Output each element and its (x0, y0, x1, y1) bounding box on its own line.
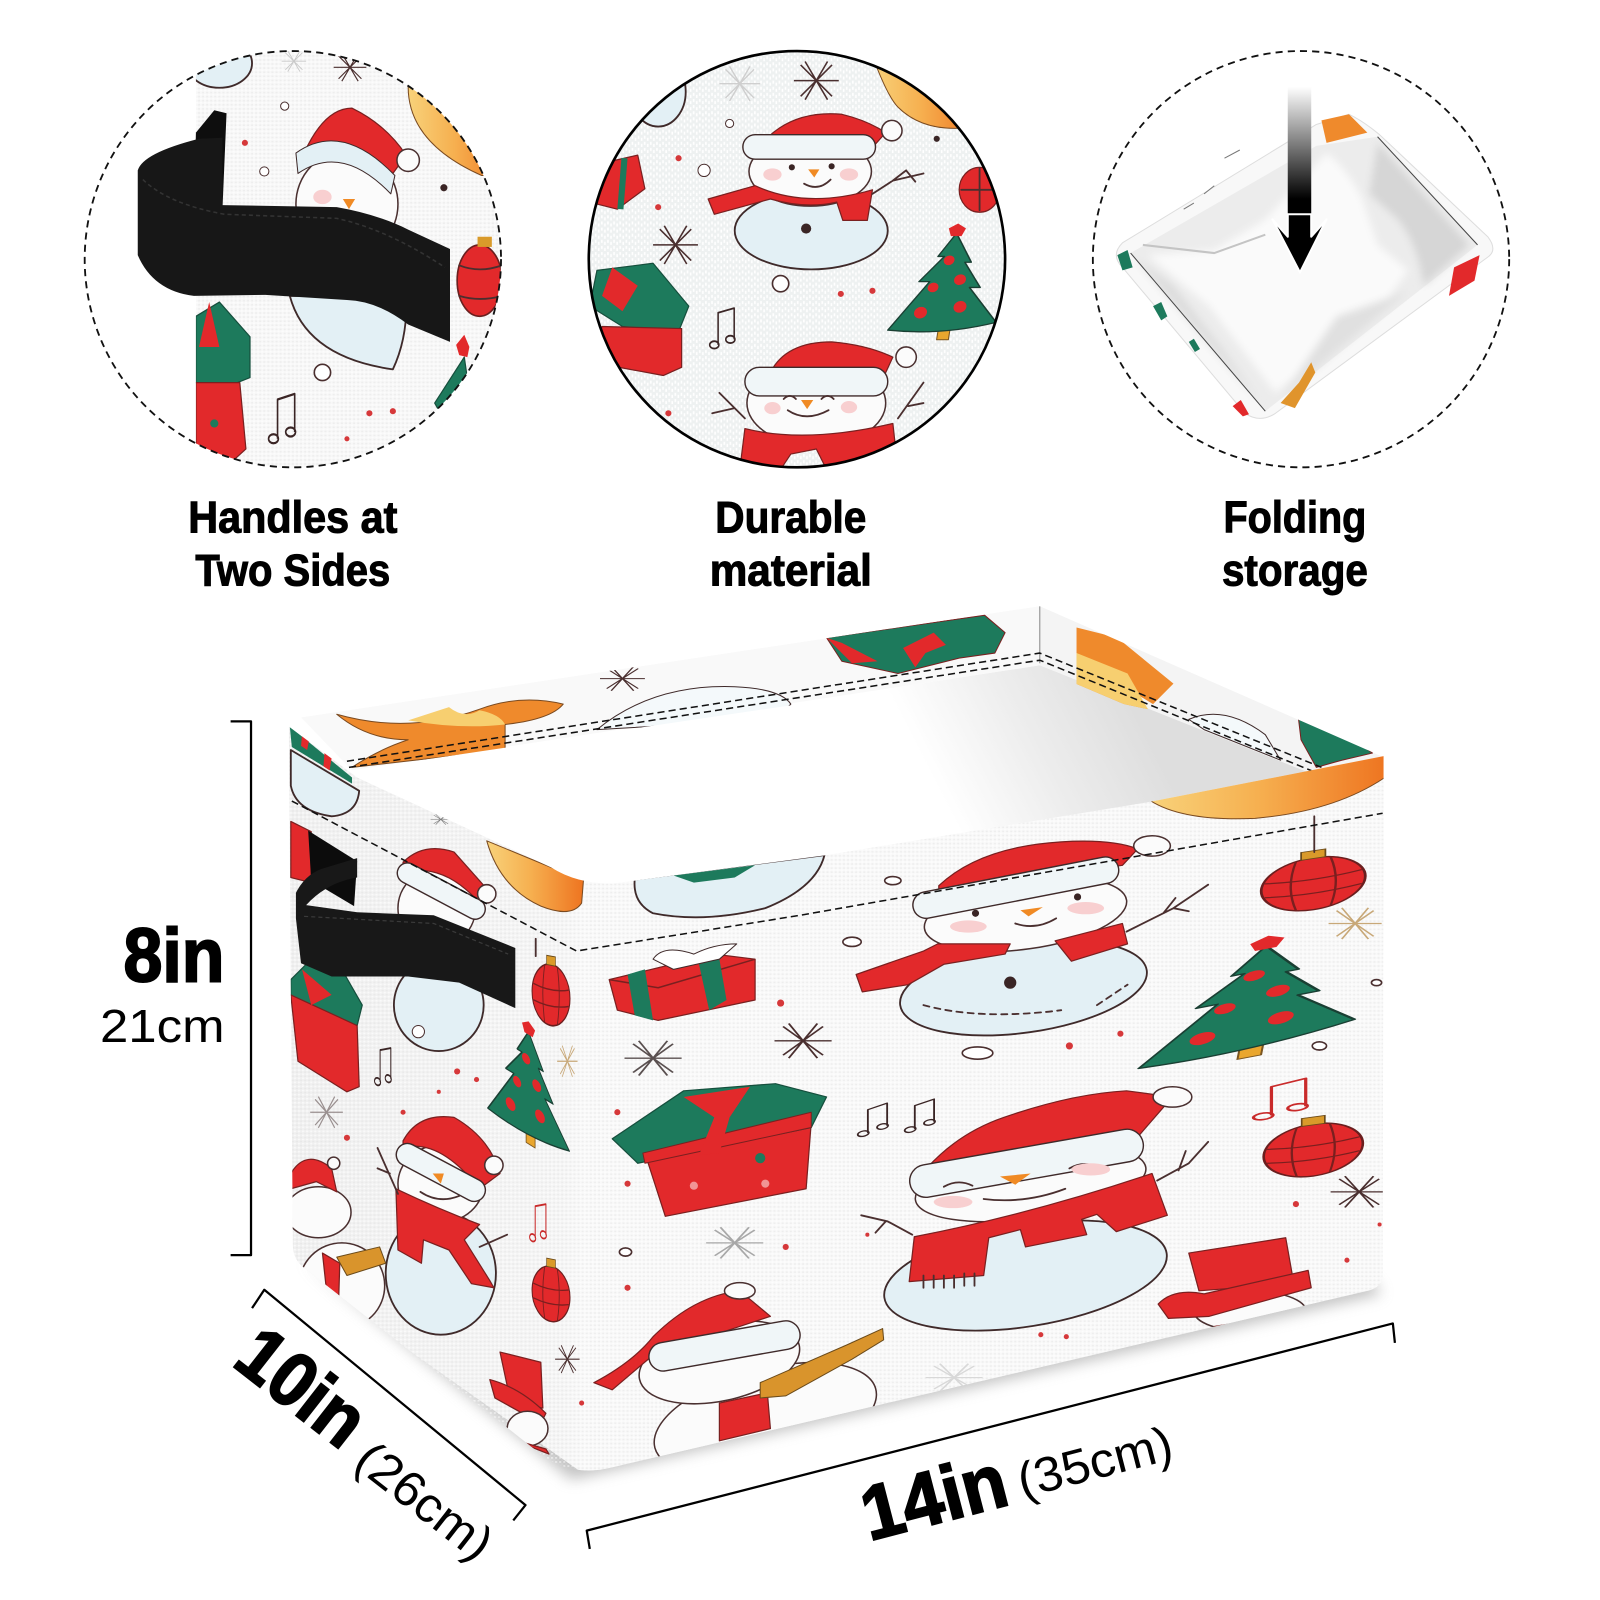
front big snowman (861, 1087, 1208, 1348)
dimension: width bracket (587, 1323, 1395, 1549)
downward arrow (1272, 87, 1327, 272)
left gift (291, 964, 362, 1092)
solid circle frame (589, 51, 1005, 467)
dimension: depth centimetres: (26cm) (345, 1431, 503, 1571)
folded basket (1116, 114, 1493, 418)
front moon (1151, 750, 1388, 819)
heading: durable material: material (710, 545, 872, 596)
rim corner binding (290, 727, 352, 784)
heading: durable material: Durable (715, 492, 866, 543)
music notes (858, 1103, 888, 1137)
heading: handles at two sides: Two Sides (195, 545, 390, 596)
left small top-hat snowman (490, 1352, 549, 1454)
front guitar snowman (593, 1282, 884, 1456)
exterior faces (286, 714, 1388, 1495)
front gift large (612, 1084, 827, 1216)
front tree (1137, 936, 1356, 1070)
dimension: width inches: 14in (852, 1438, 1016, 1557)
front face fabric (587, 750, 1388, 1480)
dimension: height inches: 8in (123, 914, 224, 999)
dashed circle frame (1093, 51, 1509, 467)
left guitar snowman (286, 1157, 386, 1329)
back walls and interior (336, 606, 1381, 824)
left upper snowman (394, 849, 496, 1051)
fabric pattern close-up (582, 46, 1012, 474)
dimension: height bracket (231, 721, 251, 1255)
black side handle (296, 831, 515, 1008)
front snowball (635, 855, 824, 917)
dimension: depth bracket (252, 1290, 526, 1520)
upper snowman (708, 114, 923, 269)
left ornaments (532, 952, 570, 1029)
dimension: height centimetres: 21cm (100, 1000, 224, 1052)
front ornaments (1260, 848, 1367, 912)
green and red gift (590, 263, 689, 376)
panel: durable material (582, 46, 1012, 474)
left top snowball (291, 750, 359, 816)
left tree (487, 1021, 570, 1152)
interior stitching (347, 653, 1321, 773)
dimension: width centimetres: (35cm) (1012, 1417, 1178, 1509)
snowflakes (1329, 908, 1382, 939)
scatter dots (614, 999, 1382, 1339)
lower snowman (712, 342, 923, 469)
front top-hat snowman (1158, 1238, 1311, 1332)
christmas tree (887, 224, 995, 340)
heading: handles at two sides: Handles at (188, 492, 397, 543)
front gift small (609, 944, 755, 1020)
left face fabric (289, 719, 592, 1480)
panel: folding storage (1093, 51, 1509, 467)
heading: folding storage: Folding (1223, 492, 1366, 543)
main basket (286, 606, 1388, 1495)
dashed circle frame (85, 51, 501, 467)
ground shadow (301, 1260, 1382, 1480)
front top snowman (856, 836, 1208, 1050)
fabric close-up with handle (138, 39, 512, 480)
panel: handles at two sides (85, 39, 512, 480)
front stitching (292, 801, 1383, 951)
black handle (138, 110, 450, 342)
dimension: depth inches: 10in (220, 1311, 383, 1464)
left big snowman (378, 1117, 507, 1335)
heading: folding storage: storage (1222, 545, 1368, 596)
left moon (487, 841, 584, 912)
